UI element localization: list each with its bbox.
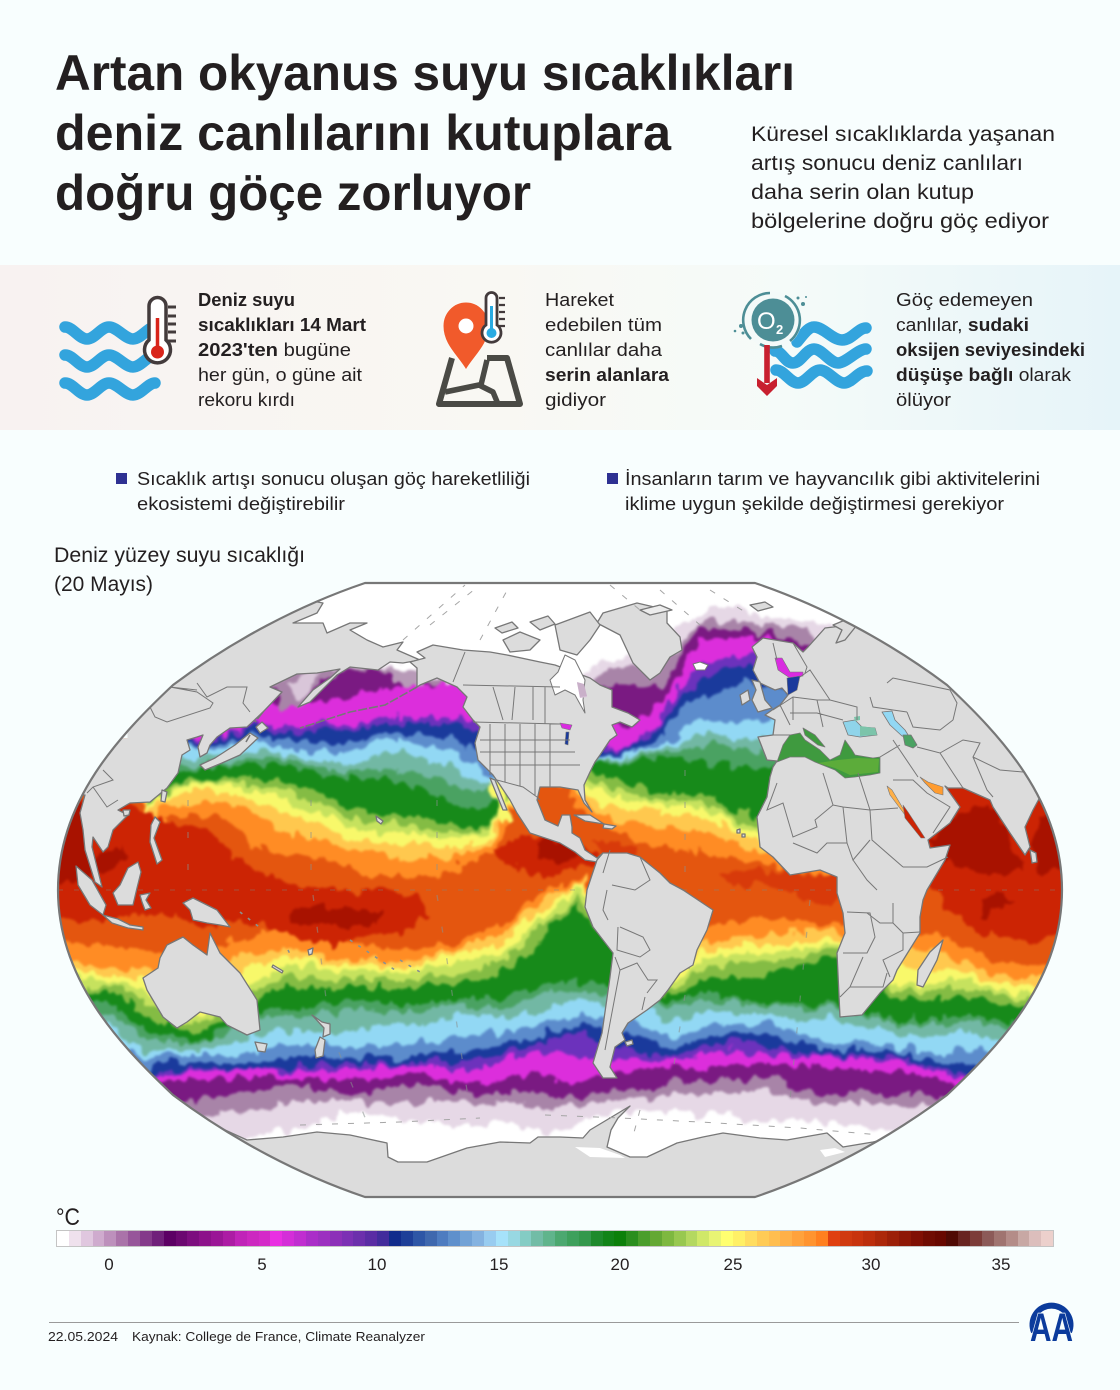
logo: AA: AA — [1030, 1306, 1073, 1350]
islands — [76, 602, 1037, 1058]
text: mobile species: gidiyor — [545, 389, 606, 410]
Australia — [143, 933, 260, 1035]
map heading: (20 Mayıs) — [54, 573, 153, 596]
inland seas and ice — [550, 655, 943, 1158]
bullet: human activities: İnsanların tarım ve hayvancılık gibi aktivitelerini — [625, 468, 1040, 489]
title: deniz canlılarını kutuplara — [55, 105, 672, 161]
icon: map pin and thermometer — [439, 292, 520, 404]
legend tick labels: 0 — [104, 1255, 114, 1274]
bullet: ecosystem: ekosistemi değiştirebilir — [137, 493, 345, 514]
longitude data gaps — [188, 770, 810, 1130]
bullet: ecosystem: Sıcaklık artışı sonucu oluşan göç hareketliliği — [137, 468, 530, 489]
text: record temperatures: sıcaklıkları 14 Mart — [198, 314, 366, 335]
equator data gaps — [58, 889, 1062, 891]
text: species unable to migrate: oksijen seviyesindeki — [896, 339, 1085, 360]
footer rule and source: Kaynak: College de France, Climate Reanalyzer — [132, 1330, 425, 1344]
Baja California — [490, 778, 507, 810]
Eurasia and Africa — [751, 626, 1039, 1018]
legend unit: °C — [56, 1204, 80, 1231]
title — [55, 45, 795, 221]
coastal and marginal sea details — [277, 662, 519, 822]
text: mobile species — [545, 289, 670, 410]
temperature bands — [0, 612, 1120, 1140]
title: Artan okyanus suyu sıcaklıkları — [55, 45, 795, 101]
text: species unable to migrate: canlılar, sudaki — [896, 314, 1029, 335]
text: species unable to migrate: Göç edemeyen — [896, 289, 1033, 310]
text: record temperatures: Deniz suyu — [198, 289, 295, 310]
intro paragraph: daha serin olan kutup — [751, 181, 974, 204]
Alaska peninsula and island chains — [246, 687, 417, 742]
North and Central America — [410, 645, 640, 865]
map heading: Deniz yüzey suyu sıcaklığı — [54, 544, 305, 567]
bullet: ecosystem — [116, 468, 530, 514]
intro paragraph — [751, 123, 1055, 233]
title: doğru göçe zorluyor — [55, 165, 531, 221]
legend colour bar — [56, 1230, 1054, 1247]
text: record temperatures: rekoru kırdı — [198, 389, 295, 410]
text: species unable to migrate: ölüyor — [896, 389, 951, 410]
text: mobile species: edebilen tüm — [545, 314, 662, 335]
text: mobile species: serin alanlara — [545, 364, 670, 385]
warm pools — [30, 780, 1080, 945]
bullet: human activities — [607, 468, 1040, 514]
legend tick labels: 20 — [611, 1255, 629, 1274]
Asia east — [79, 602, 420, 888]
text: record temperatures — [198, 289, 366, 410]
text: mobile species: canlılar daha — [545, 339, 663, 360]
intro paragraph: Küresel sıcaklıklarda yaşanan — [751, 123, 1055, 146]
land masses — [75, 601, 1039, 1196]
legend tick labels: 35 — [992, 1255, 1010, 1274]
footer rule and source: 22.05.2024 — [48, 1330, 118, 1344]
text: mobile species: Hareket — [545, 289, 614, 310]
intro paragraph: artış sonucu deniz canlıları — [751, 152, 1023, 175]
South America — [585, 853, 713, 1078]
legend tick labels: 5 — [257, 1255, 267, 1274]
map outline — [58, 583, 1062, 1197]
Greenland — [597, 603, 682, 680]
footer rule and source — [48, 1322, 1019, 1344]
text: record temperatures: her gün, o güne ait — [198, 364, 362, 385]
Antarctica — [225, 1105, 876, 1196]
bullet: human activities: iklime uygun şekilde değiştirmesi gerekiyor — [625, 493, 1004, 514]
text: species unable to migrate: düşüşe bağlı olarak — [896, 364, 1072, 385]
icon: oxygen drop over waves: O — [757, 308, 776, 335]
legend tick labels — [104, 1255, 1010, 1274]
world map: sea surface temperature — [59, 584, 1061, 1196]
legend tick labels: 25 — [724, 1255, 742, 1274]
panel: key facts strip — [0, 265, 1120, 430]
text: record temperatures: 2023'ten bugüne — [198, 339, 351, 360]
map heading — [54, 544, 305, 596]
intro paragraph: bölgelerine doğru göç ediyor — [751, 210, 1049, 233]
icon: oxygen drop over waves: 2 — [776, 322, 783, 337]
legend tick labels: 15 — [490, 1255, 508, 1274]
icon: oxygen drop over waves — [734, 292, 867, 396]
legend tick labels: 30 — [862, 1255, 880, 1274]
text: species unable to migrate — [896, 289, 1085, 410]
icon: waves and thermometer — [65, 298, 176, 395]
sea ice dashes — [300, 585, 880, 1140]
country borders — [87, 643, 1023, 1050]
legend tick labels: 10 — [368, 1255, 386, 1274]
